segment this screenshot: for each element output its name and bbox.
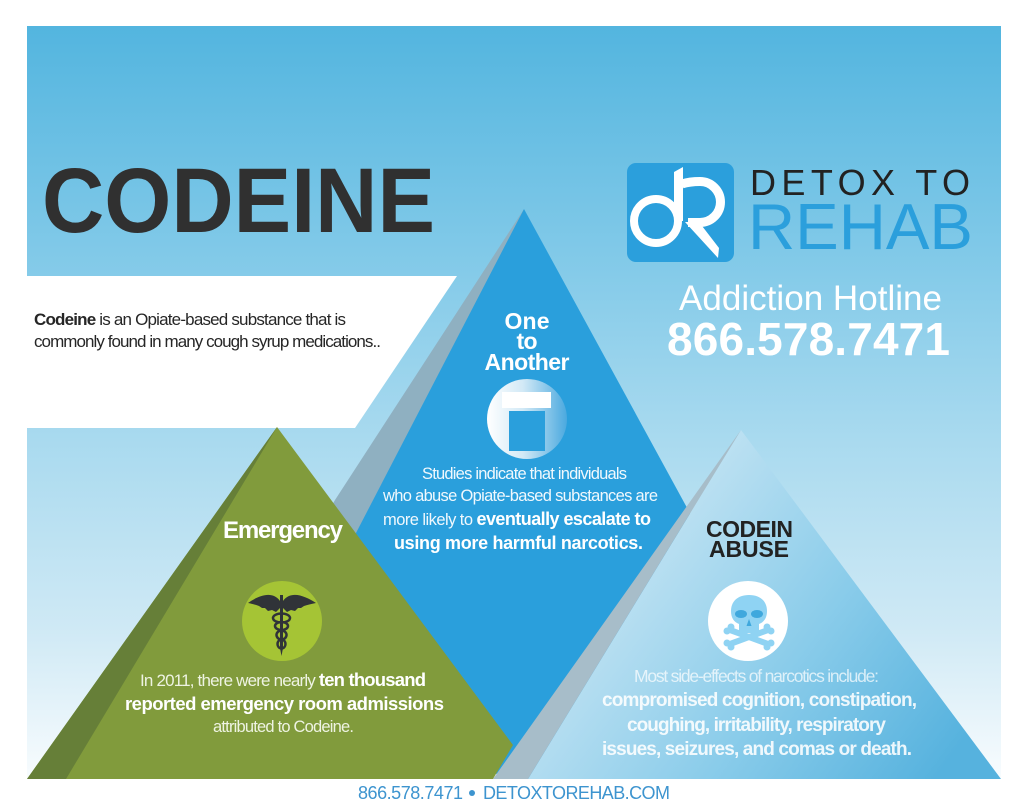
text: side effects: coughing, irritability, respiratory [627,715,886,736]
hotline: 866.578.7471 [667,313,950,365]
heading: codein abuse: ABUSE [709,536,789,562]
text: studies: who abuse Opiate-based substances are [382,487,658,505]
heading: codein abuse: CODEIN [706,516,793,542]
text: studies: using more harmful narcotics. [394,533,643,553]
hotline [667,279,950,365]
triangle shadow [300,209,524,560]
pale triangle [528,430,1001,779]
text: emergency admissions: attributed to Codeine. [213,718,354,736]
intro white banner [27,276,457,428]
heading: one to another: Another [484,349,570,375]
logo badge [627,163,734,262]
text: emergency admissions: reported emergency room admissions [125,693,444,714]
footer contact line [358,783,670,803]
logo wordmark: REHAB [748,190,973,263]
icon: skull [708,581,788,661]
icon: caduceus [242,581,322,661]
blue triangle [342,209,835,779]
text: side effects [602,666,917,760]
text: studies [382,465,658,553]
panel: one to another [300,209,835,779]
logo wordmark: DETOX TO [750,162,970,203]
heading: codein abuse [706,516,793,562]
text: side effects: compromised cognition, constipation, [602,690,917,711]
text: side effects: Most side-effects of narcotics include: [634,666,879,686]
triangle shadow [493,430,741,779]
icon: pill bottle [487,379,567,459]
panel: emergency [27,427,513,779]
text: emergency admissions [125,669,444,736]
text: emergency admissions: In 2011, there were nearly ten thousand [140,669,426,690]
triangle shadow [27,427,277,779]
text: studies: more likely to eventually escalate to [383,509,651,529]
intro text: Codeine is an Opiate-based substance that is [34,310,346,329]
text: side effects: issues, seizures, and comas or death. [602,739,912,760]
green triangle clipped by grey strip [27,427,513,779]
text: studies: Studies indicate that individuals [422,465,627,483]
logo: Detox to Rehab [627,162,973,263]
heading: one to another: to [516,328,538,354]
title: CODEINE [42,150,435,252]
hotline: Addiction Hotline [679,279,942,318]
footer contact line: 866.578.7471 [358,783,463,803]
panel: codein abuse [493,430,1001,779]
heading: one to another: One [504,308,550,334]
heading: one to another [484,308,570,375]
intro text: commonly found in many cough syrup medications.. [34,332,381,351]
heading: emergency: Emergency [223,517,344,544]
intro text [34,310,381,351]
footer contact line: DETOXTOREHAB.COM [483,783,670,803]
